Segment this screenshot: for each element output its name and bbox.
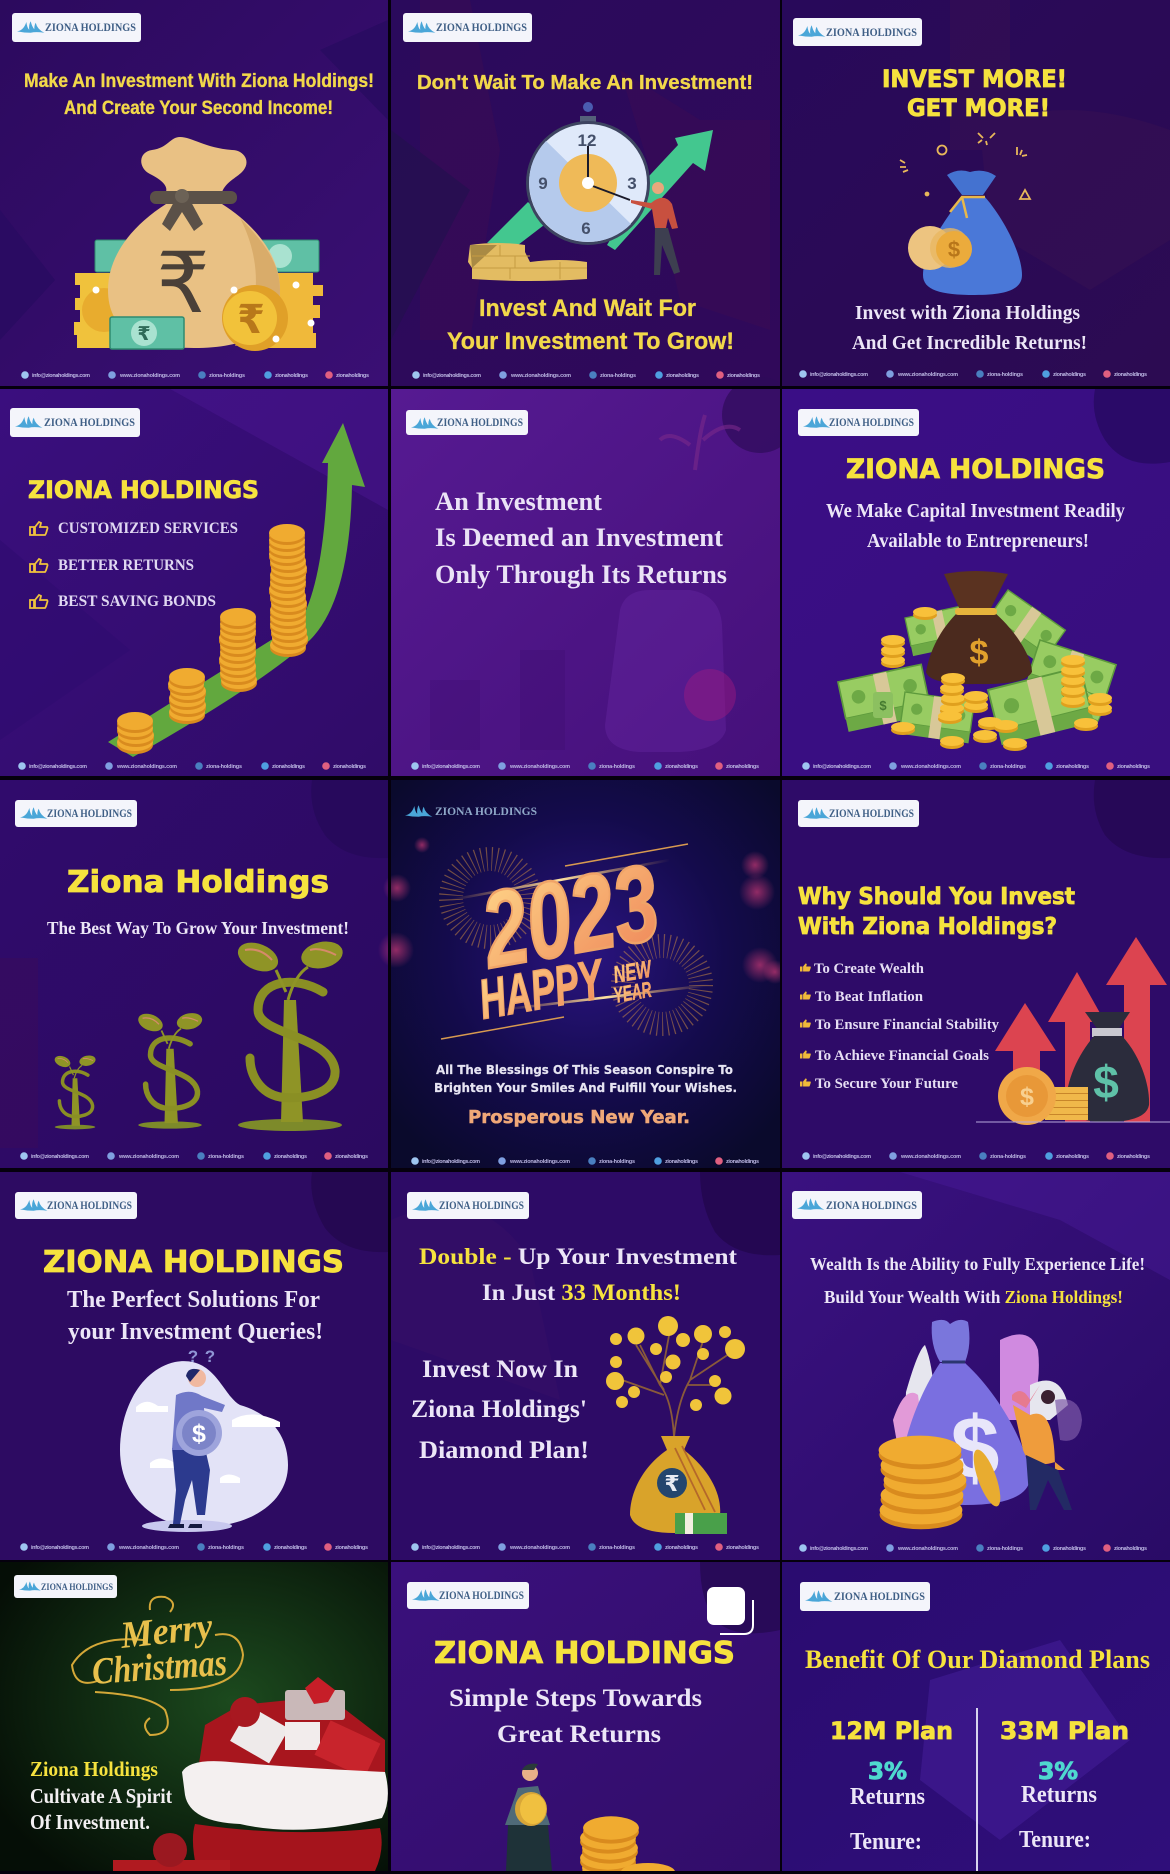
footer contact bar: zionaholdings — [1117, 1154, 1150, 1160]
panel: don't wait — [391, 0, 780, 386]
plan column: 33M: Tenure: — [1019, 1827, 1091, 1853]
footer contact bar — [411, 1543, 759, 1551]
footer contact bar: info@zionaholdings.com — [810, 1546, 868, 1552]
merry christmas title: Christmas — [91, 1642, 228, 1693]
footer contact bar: zionaholdings — [274, 1154, 307, 1160]
footer contact bar: zionaholdings — [1056, 764, 1089, 770]
heading: ZIONA HOLDINGS — [434, 1636, 735, 1671]
logo: ZIONA HOLDINGS — [834, 1591, 925, 1603]
heading: Don't Wait To Make An Investment! — [417, 72, 753, 94]
footer contact bar: ziona-holdings — [599, 764, 635, 770]
icon: clock: 12 — [578, 131, 596, 150]
subheading: Simple Steps Towards — [449, 1685, 702, 1712]
logo — [792, 1191, 922, 1219]
text: invest with ziona: Invest with Ziona Holdings — [855, 303, 1080, 324]
heading: Build Your Wealth With Ziona Holdings! — [824, 1287, 1123, 1307]
panel: merry christmas — [0, 1562, 388, 1871]
heading: And Create Your Second Income! — [64, 98, 333, 119]
heading: In Just 33 Months! — [482, 1280, 681, 1305]
icon: man holding coin — [505, 1764, 552, 1871]
panel: capital investment — [782, 389, 1170, 776]
footer contact bar: ziona-holdings — [208, 1545, 244, 1551]
footer contact bar — [799, 1544, 1147, 1552]
footer contact bar — [20, 1152, 368, 1160]
icon: clock — [526, 102, 650, 245]
plan column: 33M: 3% — [1038, 1759, 1078, 1785]
subheading: your Investment Queries! — [68, 1319, 323, 1345]
list: reasons: To Create Wealth — [814, 961, 925, 977]
text: invest and wait — [447, 295, 734, 355]
footer contact bar — [802, 1152, 1150, 1160]
panel: perfect solutions — [0, 1172, 388, 1560]
footer contact bar: zionaholdings — [726, 1159, 759, 1165]
merry christmas title — [72, 1597, 243, 1735]
text: diamond plan: Ziona Holdings' — [411, 1396, 587, 1423]
footer contact bar: zionaholdings — [1056, 1154, 1089, 1160]
footer contact bar: info@zionaholdings.com — [422, 1545, 480, 1551]
footer contact bar: info@zionaholdings.com — [813, 1154, 871, 1160]
footer contact bar: ziona-holdings — [599, 1545, 635, 1551]
logo — [403, 13, 532, 42]
panel: customized services — [0, 389, 388, 776]
divider — [976, 1708, 978, 1871]
decorative bokeh — [378, 837, 787, 984]
footer contact bar: info@zionaholdings.com — [423, 373, 481, 379]
year title: 2023 — [472, 841, 667, 991]
icon: dark money bag and coin: $ — [1020, 1083, 1034, 1111]
footer contact bar: zionaholdings — [726, 1545, 759, 1551]
merry christmas title: Merry — [118, 1606, 215, 1657]
footer contact bar: info@zionaholdings.com — [422, 764, 480, 770]
icon: money tree in bag — [606, 1316, 745, 1534]
subheading: The Perfect Solutions For — [67, 1287, 320, 1313]
icon: clock: 3 — [627, 174, 637, 193]
plan column: 12M: Tenure: — [850, 1829, 922, 1855]
logo — [406, 410, 528, 435]
footer contact bar: zionaholdings — [333, 764, 366, 770]
plan column: 33M: Returns — [1021, 1782, 1097, 1808]
icon: dark money bag and coin: $ — [1093, 1056, 1119, 1108]
subheading — [826, 501, 1125, 552]
footer contact bar: info@zionaholdings.com — [813, 764, 871, 770]
plan column: 33M: 33M Plan — [1000, 1717, 1129, 1745]
footer contact bar: www.zionaholdings.com — [119, 373, 180, 379]
subheading — [449, 1685, 702, 1748]
text: cultivate a spirit — [30, 1757, 172, 1834]
list: services — [30, 520, 238, 610]
footer contact bar: www.zionaholdings.com — [116, 764, 177, 770]
footer contact bar — [411, 1157, 759, 1165]
logo: ZIONA HOLDINGS — [45, 20, 136, 34]
footer contact bar: zionaholdings — [1053, 372, 1086, 378]
footer contact bar — [411, 762, 759, 770]
panel: best way to grow — [0, 780, 388, 1168]
heading — [882, 65, 1067, 122]
list: services: BEST SAVING BONDS — [58, 593, 216, 610]
panel: double up — [391, 1172, 780, 1560]
footer contact bar: zionaholdings — [665, 1159, 698, 1165]
logo — [800, 1582, 930, 1611]
heading: INVEST MORE! — [882, 65, 1067, 93]
logo: ZIONA HOLDINGS — [44, 415, 135, 429]
text: diamond plan: Invest Now In — [422, 1356, 578, 1383]
icon: clock: 6 — [581, 219, 591, 238]
heading: Ziona Holdings — [67, 865, 329, 900]
footer contact bar — [802, 762, 1150, 770]
icon: clock: 9 — [538, 174, 548, 193]
year title: HAPPY — [474, 947, 610, 1031]
logo — [10, 408, 140, 437]
list: reasons — [800, 961, 999, 1092]
icon: rupee money bag with coins and notes: ₹ — [237, 297, 265, 343]
heading — [810, 1254, 1145, 1307]
footer contact bar: zionaholdings — [727, 373, 760, 379]
footer contact bar: ziona-holdings — [599, 1159, 635, 1165]
icon: coins — [468, 243, 587, 281]
footer contact bar: www.zionaholdings.com — [118, 1545, 179, 1551]
prosperous text: Prosperous New Year. — [468, 1107, 690, 1128]
plan column: 12M: Returns — [850, 1784, 925, 1810]
footer contact bar: zionaholdings — [1114, 1546, 1147, 1552]
footer contact bar: zionaholdings — [665, 1545, 698, 1551]
footer contact bar: info@zionaholdings.com — [29, 764, 87, 770]
footer contact bar: zionaholdings — [666, 373, 699, 379]
icon: rupee money bag with coins and notes: ₹ — [137, 323, 151, 345]
logo: ZIONA HOLDINGS — [439, 1200, 524, 1212]
icon: hand pointer — [30, 522, 48, 608]
footer contact bar — [21, 371, 369, 379]
footer contact bar: www.zionaholdings.com — [897, 1546, 958, 1552]
fireworks — [451, 859, 701, 1024]
panel: why invest — [782, 780, 1170, 1168]
footer contact bar: ziona-holdings — [600, 373, 636, 379]
icon: thinking man with coin — [120, 1347, 288, 1532]
icon: rupee money bag with coins and notes — [74, 137, 323, 351]
footer contact bar: ziona-holdings — [987, 1546, 1023, 1552]
chart icon: green growth arrow — [108, 423, 365, 757]
subheading: Available to Entrepreneurs! — [867, 531, 1089, 552]
footer contact bar: zionaholdings — [1117, 764, 1150, 770]
logo: ZIONA HOLDINGS — [47, 808, 132, 820]
list: reasons: To Ensure Financial Stability — [815, 1017, 999, 1033]
footer contact bar: ziona-holdings — [206, 764, 242, 770]
footer contact bar: ziona-holdings — [209, 373, 245, 379]
icon: thumbs up — [800, 963, 811, 1086]
footer contact bar: zionaholdings — [1053, 1546, 1086, 1552]
panel: diamond plans — [782, 1562, 1170, 1874]
text: cultivate a spirit: Of Investment. — [30, 1810, 150, 1834]
list: services: CUSTOMIZED SERVICES — [58, 520, 238, 537]
logo — [15, 800, 137, 827]
text: cultivate a spirit: Cultivate A Spirit — [30, 1784, 172, 1808]
icon: man — [631, 182, 680, 275]
icon: brown money bag with cash — [838, 571, 1116, 751]
quote text: Is Deemed an Investment — [435, 523, 723, 552]
icon: coin stack — [580, 1816, 675, 1874]
plan column: 12M: 3% — [868, 1759, 907, 1785]
icon: multiple posts — [707, 1587, 753, 1634]
icon: rupee money bag with coins and notes: ₹ — [156, 234, 210, 332]
year title: YEAR — [612, 977, 653, 1008]
greeting text: All The Blessings Of This Season Conspire To — [436, 1062, 733, 1077]
subheading — [67, 1287, 323, 1345]
plan column: 12M: 12M Plan — [830, 1717, 953, 1745]
panel: deemed an investment — [391, 377, 798, 776]
logo — [407, 1582, 529, 1609]
heading: ZIONA HOLDINGS — [28, 476, 259, 504]
footer contact bar: ziona-holdings — [990, 764, 1026, 770]
heading: Why Should You Invest — [798, 884, 1075, 910]
greeting text: Brighten Your Smiles And Fulfill Your Wishes. — [434, 1080, 737, 1095]
logo: ZIONA HOLDINGS — [435, 806, 537, 818]
icon: thinking man with coin: ? — [205, 1347, 215, 1366]
icon: thinking man with coin: $ — [192, 1420, 206, 1448]
footer contact bar: zionaholdings — [726, 764, 759, 770]
icon: dollar plants — [53, 937, 345, 1131]
list: reasons: To Beat Inflation — [815, 989, 924, 1005]
footer contact bar: zionaholdings — [335, 1154, 368, 1160]
year title — [472, 841, 667, 1031]
footer contact bar: www.zionaholdings.com — [897, 372, 958, 378]
heading — [419, 1244, 737, 1305]
logo — [15, 1192, 137, 1219]
icon: dark money bag and coin — [976, 1012, 1170, 1125]
footer contact bar: zionaholdings — [275, 373, 308, 379]
footer contact bar: zionaholdings — [665, 764, 698, 770]
footer contact bar: zionaholdings — [274, 1545, 307, 1551]
quote text: Only Through Its Returns — [435, 560, 727, 589]
text: diamond plan: Diamond Plan! — [419, 1437, 589, 1464]
heading: Benefit Of Our Diamond Plans — [805, 1645, 1150, 1674]
footer contact bar — [20, 1543, 368, 1551]
footer contact bar — [799, 370, 1147, 378]
panel: simple steps — [391, 1562, 780, 1874]
icon: brown money bag with cash: $ — [879, 698, 887, 713]
heading: GET MORE! — [907, 94, 1050, 122]
logo: ZIONA HOLDINGS — [437, 417, 523, 429]
logo — [798, 800, 919, 827]
logo: ZIONA HOLDINGS — [826, 25, 917, 39]
text: cultivate a spirit: Ziona Holdings — [30, 1757, 158, 1781]
logo: ZIONA HOLDINGS — [829, 808, 914, 820]
icon: wealth bag with woman and coins — [879, 1320, 1082, 1529]
heading: Double - Up Your Investment — [419, 1244, 737, 1269]
footer contact bar: www.zionaholdings.com — [509, 1545, 570, 1551]
icon: money tree in bag: ₹ — [664, 1472, 680, 1497]
text: diamond plan — [411, 1356, 589, 1464]
decorative lines — [441, 844, 710, 1039]
icon: blue money bag: $ — [948, 237, 960, 262]
footer contact bar — [412, 371, 760, 379]
panel: wealth — [782, 1172, 1170, 1560]
heading — [798, 884, 1075, 940]
icon: sparkles — [900, 133, 1030, 199]
logo: ZIONA HOLDINGS — [436, 20, 527, 34]
subheading: Great Returns — [497, 1721, 661, 1748]
panel: invest more — [782, 0, 1170, 386]
panel: happy new year — [378, 780, 787, 1168]
footer contact bar: www.zionaholdings.com — [509, 1159, 570, 1165]
footer contact bar: www.zionaholdings.com — [118, 1154, 179, 1160]
logo — [407, 1192, 529, 1219]
text: invest with ziona: And Get Incredible Returns! — [852, 333, 1087, 354]
list: reasons: To Secure Your Future — [815, 1076, 958, 1092]
heading: With Ziona Holdings? — [798, 914, 1057, 940]
text: invest and wait: Your Investment To Grow! — [447, 328, 734, 355]
footer contact bar: ziona-holdings — [987, 372, 1023, 378]
icon: coin stacks — [117, 524, 308, 754]
logo: ZIONA HOLDINGS — [826, 1200, 917, 1212]
logo — [14, 1575, 117, 1598]
chart icon: growth arrow — [487, 130, 713, 250]
footer contact bar: zionaholdings — [336, 373, 369, 379]
plan column: 12M — [830, 1717, 953, 1874]
subheading: The Best Way To Grow Your Investment! — [47, 918, 349, 938]
footer contact bar: ziona-holdings — [990, 1154, 1026, 1160]
heading: ZIONA HOLDINGS — [846, 454, 1105, 485]
logo — [798, 409, 919, 436]
quote text: An Investment — [435, 487, 602, 516]
logo: ZIONA HOLDINGS — [41, 1583, 113, 1593]
footer contact bar: info@zionaholdings.com — [32, 373, 90, 379]
footer contact bar: info@zionaholdings.com — [31, 1545, 89, 1551]
year title: NEW — [611, 955, 655, 989]
icon: blue money bag — [908, 171, 1022, 295]
footer contact bar: info@zionaholdings.com — [810, 372, 868, 378]
heading: ZIONA HOLDINGS — [43, 1245, 344, 1280]
footer contact bar: info@zionaholdings.com — [31, 1154, 89, 1160]
footer contact bar: www.zionaholdings.com — [509, 764, 570, 770]
logo: ZIONA HOLDINGS — [829, 417, 914, 429]
greeting text — [434, 1062, 737, 1095]
footer contact bar: info@zionaholdings.com — [422, 1159, 480, 1165]
footer contact bar: ziona-holdings — [208, 1154, 244, 1160]
list: reasons: To Achieve Financial Goals — [815, 1048, 989, 1064]
icon: wealth bag with woman and coins: $ — [951, 1398, 999, 1497]
text: invest with ziona — [852, 303, 1087, 354]
icon: santa sack with gifts — [113, 1677, 388, 1871]
text: invest and wait: Invest And Wait For — [479, 295, 696, 322]
logo — [12, 13, 141, 42]
logo: ZIONA HOLDINGS — [439, 1590, 524, 1602]
logo: ZIONA HOLDINGS — [47, 1200, 132, 1212]
list: services: BETTER RETURNS — [58, 557, 194, 574]
footer contact bar: zionaholdings — [335, 1545, 368, 1551]
chart icon: red arrows — [995, 937, 1167, 1122]
heading: Wealth Is the Ability to Fully Experience Life! — [810, 1254, 1145, 1274]
footer contact bar: zionaholdings — [272, 764, 305, 770]
panel: make an investment — [0, 0, 388, 386]
icon: brown money bag with cash: $ — [970, 634, 989, 672]
logo — [793, 18, 922, 46]
plan column: 33M — [1000, 1717, 1129, 1874]
subheading: We Make Capital Investment Readily — [826, 501, 1125, 522]
footer contact bar: www.zionaholdings.com — [510, 373, 571, 379]
footer contact bar — [18, 762, 366, 770]
quote text — [435, 487, 727, 589]
footer contact bar: www.zionaholdings.com — [900, 1154, 961, 1160]
heading: Make An Investment With Ziona Holdings! — [24, 71, 374, 92]
footer contact bar: zionaholdings — [1114, 372, 1147, 378]
heading — [24, 71, 374, 119]
icon: thinking man with coin: ? — [188, 1347, 198, 1366]
footer contact bar: www.zionaholdings.com — [900, 764, 961, 770]
